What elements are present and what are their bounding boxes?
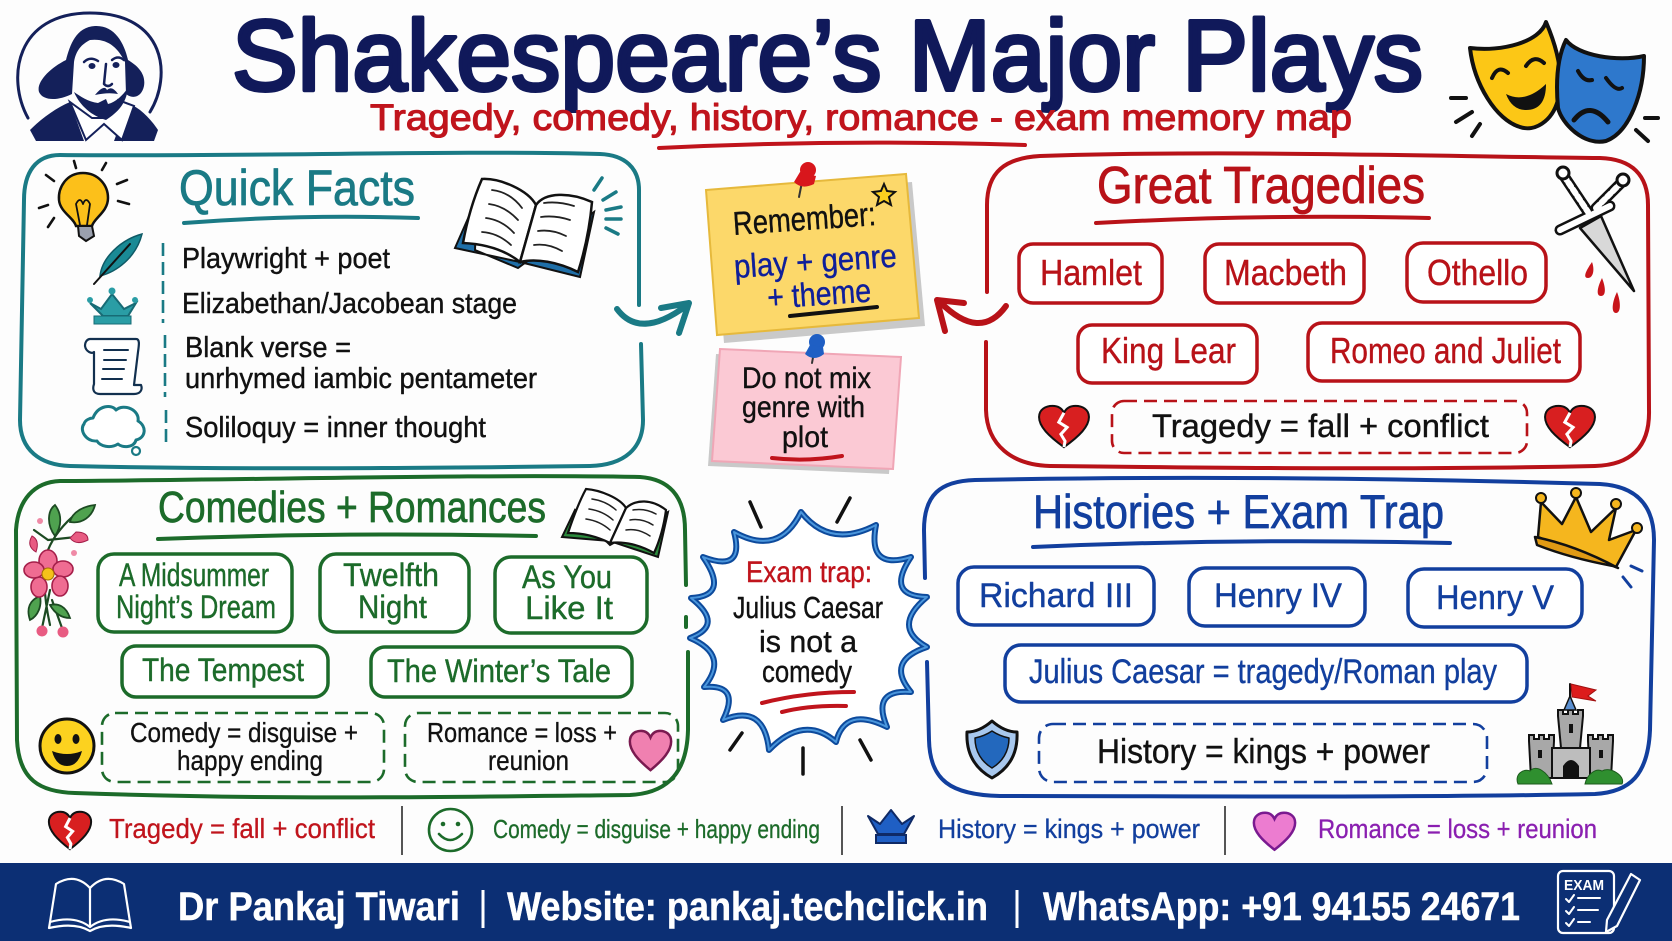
icon: red pin: [794, 162, 816, 197]
contact details: Website: pankaj.techclick.in: [507, 885, 988, 929]
portrait: Shakespeare: [18, 13, 161, 141]
panel: comedies and romances: Twelfth: [343, 557, 439, 593]
panel: quick facts: [20, 153, 643, 468]
icon: pink heart: [630, 731, 671, 770]
title: Shakespeare’s Major Plays: [232, 0, 1423, 112]
icon: star: [873, 184, 895, 205]
icon: feather: [94, 234, 142, 284]
heading: Comedies + Romances: Comedies + Romances: [158, 483, 546, 532]
icon: light bulb: [39, 161, 129, 241]
text: facts: Elizabethan/Jacobean stage: [182, 288, 517, 320]
legend: tragedy: Tragedy = fall + conflict: [109, 813, 375, 844]
sticky note: remember: [706, 162, 925, 343]
subtitle: Tragedy, comedy, history, romance - exam memory map: [370, 97, 1352, 138]
icon: gold crown: [1535, 488, 1642, 587]
callout: exam trap burst: Julius Caesar: [733, 590, 883, 625]
panel: comedies and romances: Like It: [525, 590, 613, 626]
play pills: [98, 554, 647, 697]
panel: histories: Richard III: [979, 577, 1133, 615]
icon: blue pin: [805, 334, 825, 363]
dashed separators: [163, 243, 166, 445]
definition: comedy: Comedy = disguise +: [130, 717, 358, 748]
panel: comedies and romances: The Tempest: [142, 652, 304, 688]
legend: history: History = kings + power: [938, 814, 1200, 844]
icon: broken heart right: [1545, 406, 1595, 447]
icon: shield: [967, 721, 1017, 778]
panel: comedies and romances: As You: [522, 559, 612, 595]
legend: tragedy: [49, 812, 375, 849]
callout: exam trap burst: comedy: [762, 654, 852, 689]
icon: white book: [49, 879, 131, 931]
definition: comedy: happy ending: [177, 745, 323, 776]
panel: great tragedies: Romeo and Juliet: [1330, 330, 1561, 371]
sticky note: do not mix: genre with: [742, 391, 865, 424]
icon: crown: [87, 288, 138, 324]
panel: great tragedies: Othello: [1427, 252, 1528, 293]
icon: smiley: [40, 719, 94, 773]
panel: histories: Henry V: [1436, 579, 1554, 617]
definition: history: History = kings + power: [1097, 733, 1430, 771]
icon: green book: [562, 489, 668, 557]
panel: histories: Julius Caesar = tragedy/Roman play: [1029, 653, 1497, 691]
sticky note: do not mix: [708, 334, 901, 474]
icon: theatre masks: [1451, 22, 1658, 142]
arrow: red to note: [937, 300, 1006, 331]
definition: tragedy: [1112, 401, 1527, 453]
icon: castle: [1517, 684, 1623, 784]
sticky note: do not mix: plot: [782, 421, 829, 454]
icon: exam sheet and pencil: [1558, 871, 1640, 933]
legend: history: [868, 810, 1200, 844]
legend: comedy: [429, 809, 820, 851]
footer bar: [0, 863, 1672, 941]
icon: thought cloud: [82, 406, 144, 455]
definition: romance: [405, 713, 678, 782]
definition: history: [1039, 724, 1487, 782]
play pills: [958, 567, 1582, 702]
panel: great tragedies: Macbeth: [1224, 252, 1347, 293]
heading: Histories + Exam Trap: Histories + Exam Trap: [1033, 485, 1444, 538]
panel: histories: Henry IV: [1214, 577, 1342, 615]
note text: [730, 194, 900, 318]
callout: exam trap burst: is not a: [759, 624, 858, 659]
panel: histories: [924, 478, 1654, 796]
callout: exam trap burst: [690, 498, 927, 774]
panel: comedies and romances: The Winter’s Tale: [387, 653, 611, 689]
panel: great tragedies: Hamlet: [1040, 252, 1142, 293]
legend: romance: [1254, 813, 1597, 850]
definition: comedy: [102, 713, 384, 782]
icon: broken heart left: [1039, 406, 1089, 447]
icon: flowers: [24, 505, 95, 638]
panel: comedies and romances: Night: [358, 589, 427, 625]
contact details: WhatsApp: +91 94155 24671: [1043, 885, 1520, 929]
legend: comedy: Comedy = disguise + happy ending: [493, 814, 820, 844]
text: facts: unrhymed iambic pentameter: [185, 363, 537, 395]
note text: + theme: [766, 272, 872, 316]
icon: exam sheet and pencil: EXAM: [1564, 877, 1604, 894]
legend strip: [49, 806, 1597, 855]
heading: Quick Facts: Quick Facts: [179, 160, 415, 216]
definition: romance: Romance = loss +: [427, 717, 617, 748]
note text: play + genre: [733, 237, 898, 285]
legend: romance: Romance = loss + reunion: [1318, 814, 1597, 844]
text: facts: Blank verse =: [185, 332, 351, 364]
note text: Remember:: [732, 195, 877, 242]
arrow: teal to note: [617, 303, 689, 333]
text: facts: [182, 243, 537, 444]
panel: comedies and romances: A Midsummer: [119, 557, 269, 593]
callout: exam trap burst: Exam trap:: [746, 556, 872, 589]
contact details: [178, 885, 1520, 929]
text: facts: Soliloquy = inner thought: [185, 412, 486, 444]
contact details: Dr Pankaj Tiwari: [178, 885, 460, 929]
panel: comedies and romances: [16, 476, 688, 797]
panel: great tragedies: King Lear: [1101, 330, 1236, 371]
definition: tragedy: Tragedy = fall + conflict: [1152, 408, 1489, 444]
panel: comedies and romances: Night’s Dream: [116, 589, 276, 625]
sticky note: do not mix: Do not mix: [742, 362, 871, 395]
heading: Great Tragedies: Great Tragedies: [1097, 157, 1425, 215]
icon: dagger: [1557, 167, 1634, 313]
panel: great tragedies: [986, 153, 1649, 468]
text: facts: Playwright + poet: [182, 243, 390, 275]
definition: romance: reunion: [488, 745, 569, 776]
play pills: [1019, 243, 1580, 383]
icon: open book: [455, 178, 621, 277]
icon: scroll: [85, 339, 142, 394]
